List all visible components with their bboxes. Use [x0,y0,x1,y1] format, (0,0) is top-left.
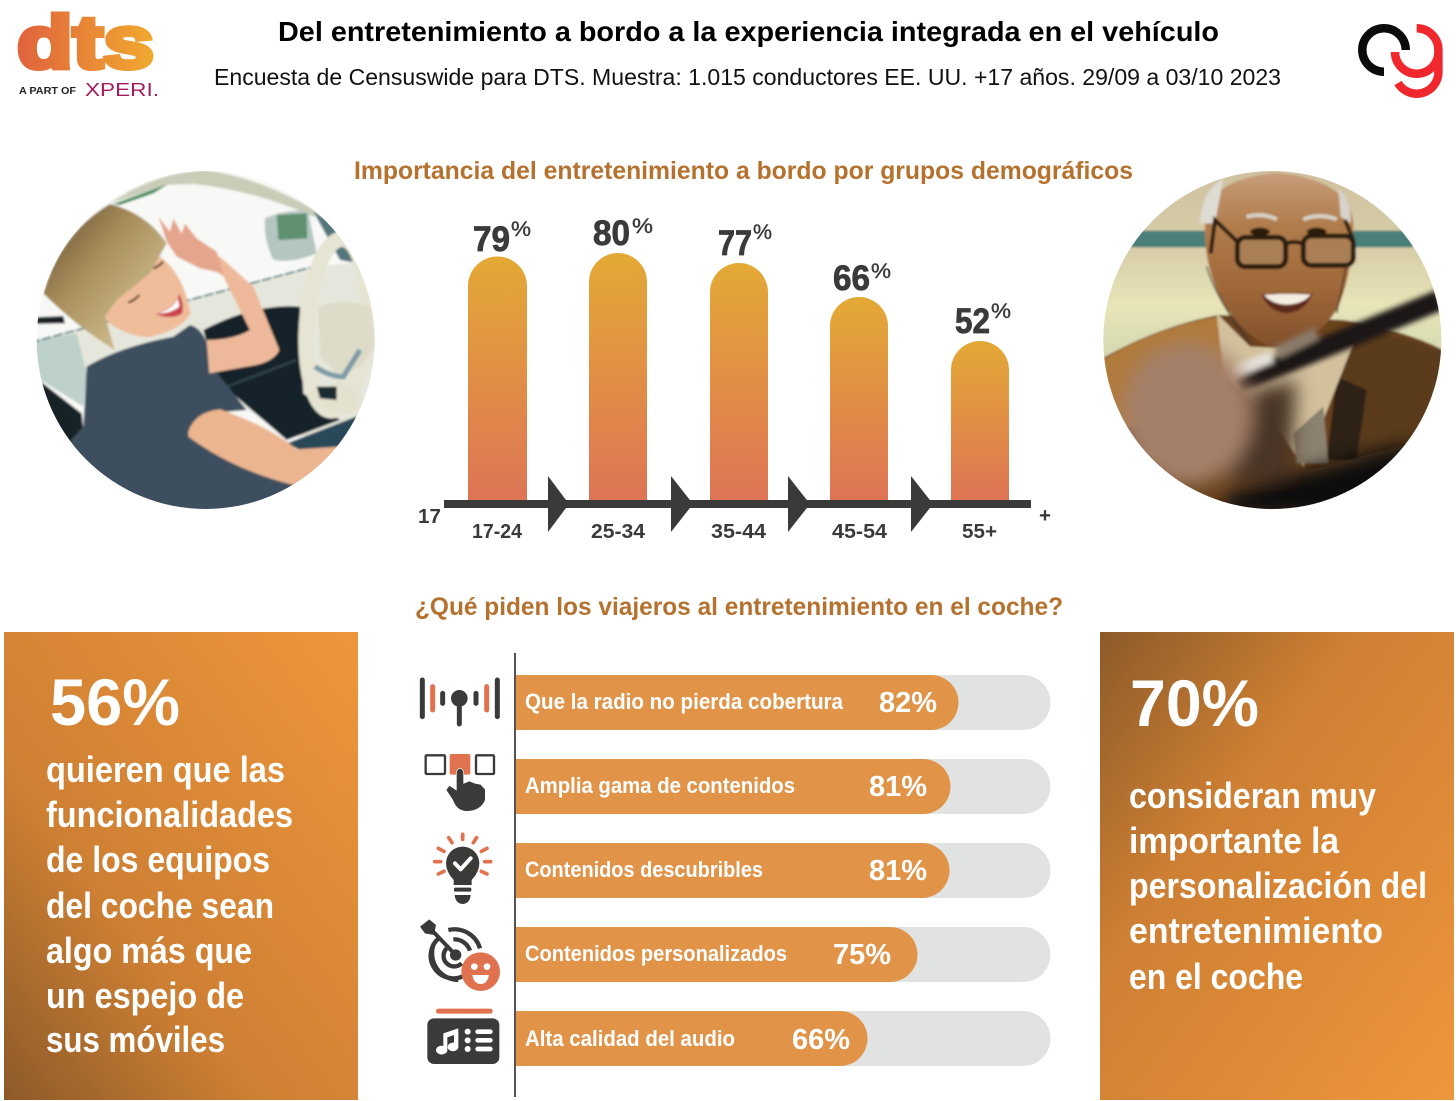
age axis with arrows [444,476,1031,532]
axis labels: 17-24 [472,521,523,543]
icon: light bulb with check [435,834,491,904]
panel: 56% stat [4,632,358,1100]
photo: woman singing in car [30,165,383,517]
panel: 56% stat: quieren que las [46,749,285,790]
panel: 70% stat [1100,632,1454,1100]
horizontal bar: radio coverage 82%: 82% [879,687,937,719]
axis labels [418,505,1051,543]
panel: 70% stat: entretenimiento [1129,910,1383,951]
icon: hand choosing content [426,754,494,811]
horizontal bar: content range 81% [516,759,1050,814]
horizontal bar: content range 81%: 81% [869,771,927,803]
horizontal bar: audio quality 66%: Alta calidad del audio [525,1026,735,1051]
horizontal bar: radio coverage 82%: Que la radio no pierda cobertura [525,689,844,714]
bar: 25-34: 80 [593,214,630,253]
panel: 70% stat: 70% [1130,666,1259,740]
panel: 56% stat: un espejo de [46,975,244,1016]
heading: what travellers ask: ¿Qué piden los viajeros al entretenimiento en el coche? [415,593,1063,621]
panel: 56% stat: de los equipos [46,839,270,880]
icon: music player [427,1009,499,1064]
axis labels: 55+ [962,521,997,543]
bar: 35-44 [710,221,772,500]
panel: 56% stat: funcionalidades [46,794,293,835]
bar: 55+: 52 [955,302,990,341]
panel: 70% stat: importante la [1129,820,1340,861]
horizontal bar: radio coverage 82% [516,675,1050,730]
logo: DTS, a part of Xperi: dts [17,1,154,84]
panel: 56% stat: algo más que [46,930,252,971]
bar: 35-44: % [753,221,772,244]
bar: 55+ [951,300,1011,500]
horizontal bar: discoverable content 81%: 81% [869,855,927,887]
logo: DTS, a part of Xperi: XPERI. [85,80,159,100]
horizontal bar: personalised content 75%: 75% [833,939,891,971]
panel: 56% stat: 56% [50,665,180,739]
axis labels: 17 [418,506,441,528]
horizontal bar: discoverable content 81% [516,843,1050,898]
horizontal bar: personalised content 75%: Contenidos personalizados [525,941,787,966]
icon: radio signal [422,680,497,724]
axis labels: 35-44 [711,521,767,543]
logo: DTS, a part of Xperi: A PART OF [19,85,77,97]
photo: smiling older man driving [1097,165,1450,517]
bar: 17-24: % [511,218,531,241]
bar chart: importance by age group [418,214,1051,543]
panel: 70% stat: consideran muy [1129,775,1376,816]
horizontal bar: personalised content 75% [516,927,1050,982]
axis labels: 45-54 [832,521,888,543]
bar: 17-24 [468,218,531,500]
icon: target with smiley [420,919,500,991]
horizontal bar: content range 81%: Amplia gama de contenidos [525,773,795,798]
bar: 35-44: 77 [718,224,752,263]
horizontal bar: audio quality 66%: 66% [792,1024,850,1056]
bar: 45-54 [830,259,891,500]
bar: 17-24: 79 [473,220,510,259]
logo: DTS, a part of Xperi [17,1,159,100]
bar: 55+: % [991,300,1011,323]
horizontal bar: discoverable content 81%: Contenidos descubribles [525,857,763,882]
heading: importance by demographic: Importancia del entretenimiento a bordo por grupos demográficos [354,157,1133,185]
axis labels: + [1039,505,1051,527]
bar: 45-54: % [871,260,891,283]
axis labels: 25-34 [591,521,646,543]
subtitle: survey source: Encuesta de Censuswide para DTS. Muestra: 1.015 conductores EE. UU. +17 años. 29/09 a 03/10 2023 [214,64,1281,90]
logo: cg monogram [1362,28,1438,94]
panel: 70% stat: en el coche [1129,956,1303,997]
panel: 56% stat: del coche sean [46,885,274,926]
panel: 70% stat: personalización del [1129,865,1427,906]
title: Del entretenimiento a bordo a la experiencia integrada en el vehículo [278,16,1219,47]
panel: 56% stat: sus móviles [46,1019,225,1060]
horizontal bar: audio quality 66% [516,1011,1050,1066]
bar: 45-54: 66 [833,259,870,298]
bar: 25-34: % [632,215,653,238]
bar: 25-34 [589,214,653,500]
divider axis for demands chart [514,653,516,1097]
